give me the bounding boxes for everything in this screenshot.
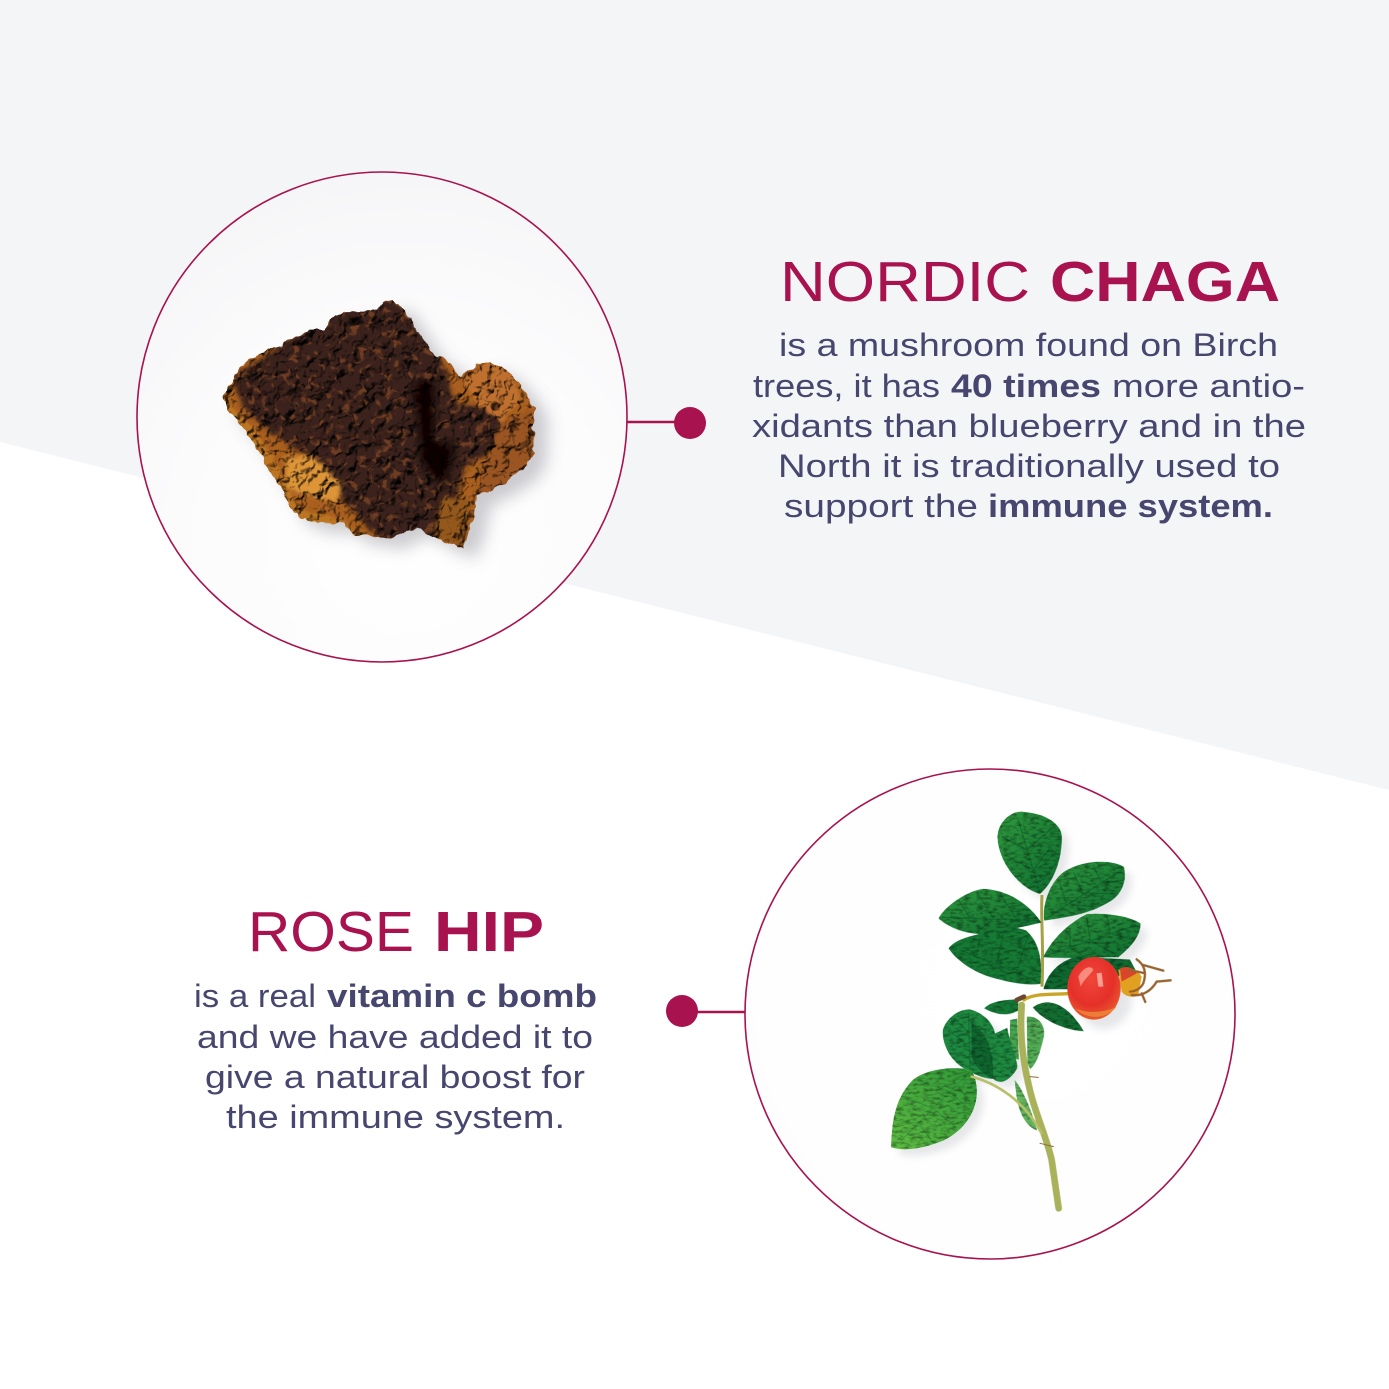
leaf: bottom light — [891, 1068, 977, 1149]
text block: rose hip description — [194, 978, 597, 1135]
connector: chaga line and dot — [627, 407, 706, 439]
text block: chaga description — [752, 327, 1306, 524]
leaf: upper right — [1044, 862, 1125, 921]
fruit: rose hip — [1067, 957, 1171, 1020]
heading: rose hip: ROSE — [248, 900, 414, 964]
text block: rose hip description: is a real — [194, 978, 316, 1014]
leaf: lower left — [948, 927, 1041, 985]
heading: nordic chaga — [780, 250, 1280, 314]
image: rose hip branch — [891, 811, 1171, 1208]
text block: rose hip description: vitamin c bomb — [327, 978, 597, 1014]
text block: chaga description: North it is traditionally used to — [778, 448, 1280, 484]
text block: chaga description: 40 times — [951, 368, 1101, 404]
background: diagonal grey band — [0, 0, 1389, 790]
text block: rose hip description: the immune system. — [226, 1099, 565, 1135]
text block: chaga description: trees, it has — [753, 368, 940, 404]
panel: nordic chaga image circle — [137, 172, 627, 662]
leaves: small pair at node — [984, 999, 1084, 1131]
panel: rose hip image circle — [745, 769, 1235, 1259]
leaves: textured foliage — [891, 811, 1141, 1149]
leaf: left — [938, 889, 1042, 934]
heading: nordic chaga: CHAGA — [1050, 250, 1280, 314]
heading: rose hip — [248, 900, 544, 964]
text block: chaga description: support the — [784, 488, 978, 524]
connector: rose hip line and dot — [666, 995, 745, 1027]
text block: rose hip description: give a natural boost for — [205, 1059, 585, 1095]
text block: chaga description: immune system. — [988, 488, 1273, 524]
text block: chaga description: is a mushroom found on Birch — [779, 327, 1278, 363]
leaf: top — [997, 811, 1062, 894]
image: chaga mushroom chunk — [213, 293, 548, 560]
text block: chaga description: more antio- — [1112, 368, 1305, 404]
leaf: right lower — [1043, 914, 1141, 958]
heading: rose hip: HIP — [434, 900, 544, 964]
text block: chaga description: xidants than blueberry and in the — [752, 408, 1306, 444]
heading: nordic chaga: NORDIC — [780, 250, 1030, 314]
stem — [972, 993, 1074, 1208]
text block: rose hip description: and we have added it to — [197, 1019, 593, 1055]
leaf: mid lower — [943, 1009, 1018, 1082]
leaf: behind fruit — [1043, 957, 1136, 989]
